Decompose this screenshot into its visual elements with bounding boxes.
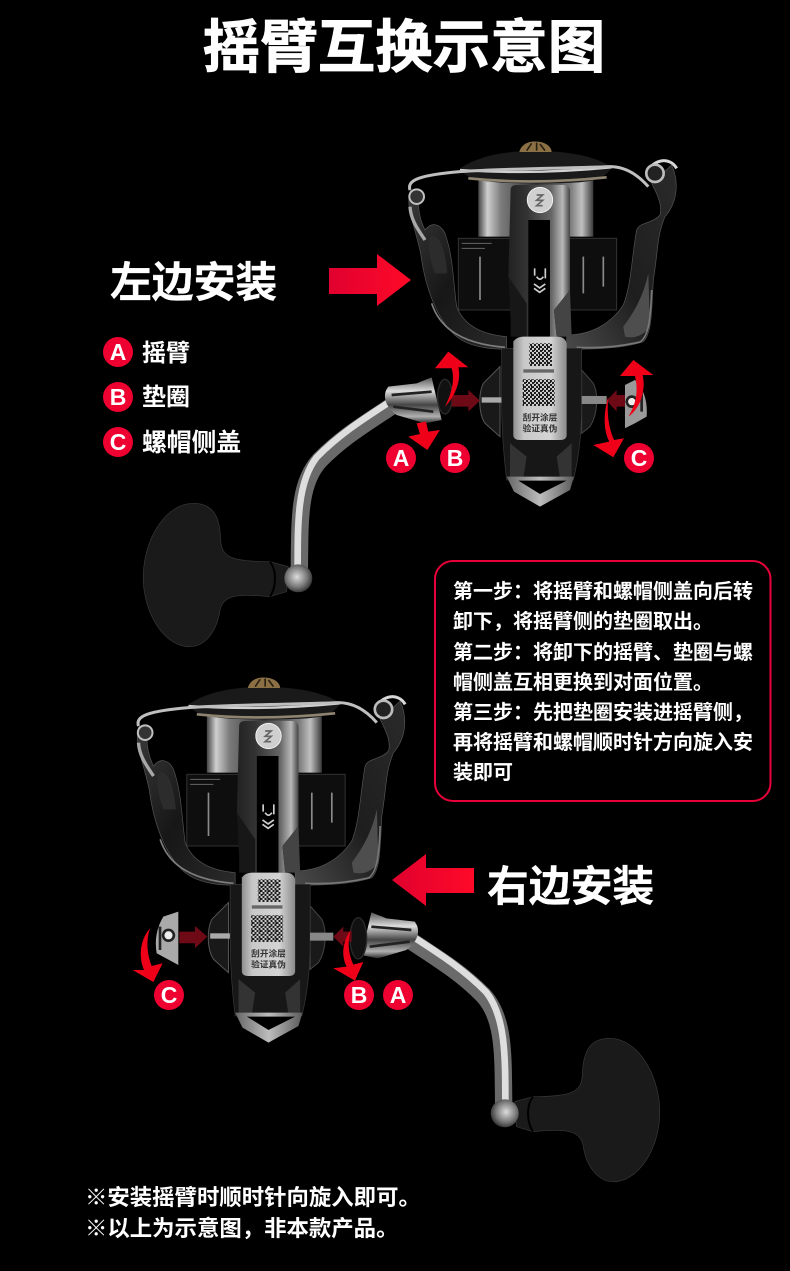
side cap C [625,380,647,428]
marker B: B [351,982,367,1008]
top reel [409,142,677,507]
marker B [440,443,470,473]
step text [453,580,753,784]
red arrow up C [620,360,653,417]
dark arrow to axle [333,927,352,947]
side cap C [156,912,178,965]
title: 摇臂互换示意图 [203,16,605,80]
dark arrow to B [452,390,480,412]
washer B [350,918,367,959]
step text: 第一步：将摇臂和螺帽侧盖向后转 [453,580,753,603]
red arrow down C [133,928,163,982]
top reel exploded parts and arrows [408,352,653,457]
step text: 再将摇臂和螺帽顺时针方向旋入安 [453,730,753,754]
step text: 卸下，将摇臂侧的垫圈取出。 [453,610,713,633]
step text: 装即可 [453,761,513,784]
heading: right install: 右边安装 [487,863,654,910]
heading: left install: 左边安装 [110,259,277,306]
legend item B [103,382,190,412]
marker C [624,443,654,473]
legend item C: 螺帽侧盖 [142,429,241,457]
red arrow down C [593,397,624,457]
axle right [310,933,333,941]
legend item C [103,427,241,457]
legend item B: 垫圈 [142,384,190,411]
step text: 第二步：将卸下的摇臂、垫圈与螺 [453,641,753,664]
legend item C: C [110,429,126,455]
red arrow up A [435,352,468,407]
marker A [386,443,416,473]
red arrow down B [333,930,363,981]
bottom reel exploded parts and arrows [133,912,367,982]
footer notes: ※以上为示意图，非本款产品。 [85,1216,398,1241]
panel: steps [435,561,770,801]
dark arrow to C [607,390,625,412]
bottom handle A [361,912,660,1182]
label text: 刮开涂层 [523,412,558,423]
footer notes [85,1185,421,1241]
footer notes: ※安装摇臂时顺时针向旋入即可。 [85,1185,421,1210]
legend item A [103,337,190,367]
bottom reel: 验证真伪 [251,958,286,969]
top reel: 验证真伪 [523,422,558,433]
marker B: B [447,445,463,471]
arrow: points to top reel [329,254,411,306]
top handle A [143,377,442,647]
bottom reel [137,678,405,1043]
legend item A: A [110,339,126,365]
marker C: C [161,982,177,1008]
marker A [383,980,413,1010]
step text: 帽侧盖互相更换到对面位置。 [453,670,713,694]
step text: 第三步：先把垫圈安装进摇臂侧， [453,701,753,724]
marker A: A [393,445,409,471]
legend item B: B [110,384,126,410]
marker C: C [631,445,647,471]
arrow: points to bottom reel [392,854,474,906]
dark arrow to body [179,926,207,948]
marker B [344,980,374,1010]
label text: 刮开涂层 [251,948,286,959]
marker A: A [390,982,406,1008]
legend [103,337,241,457]
axle right [582,396,607,404]
red arrow down A [408,422,440,450]
marker C [154,980,184,1010]
legend item A: 摇臂 [142,340,190,367]
washer B [438,379,452,414]
